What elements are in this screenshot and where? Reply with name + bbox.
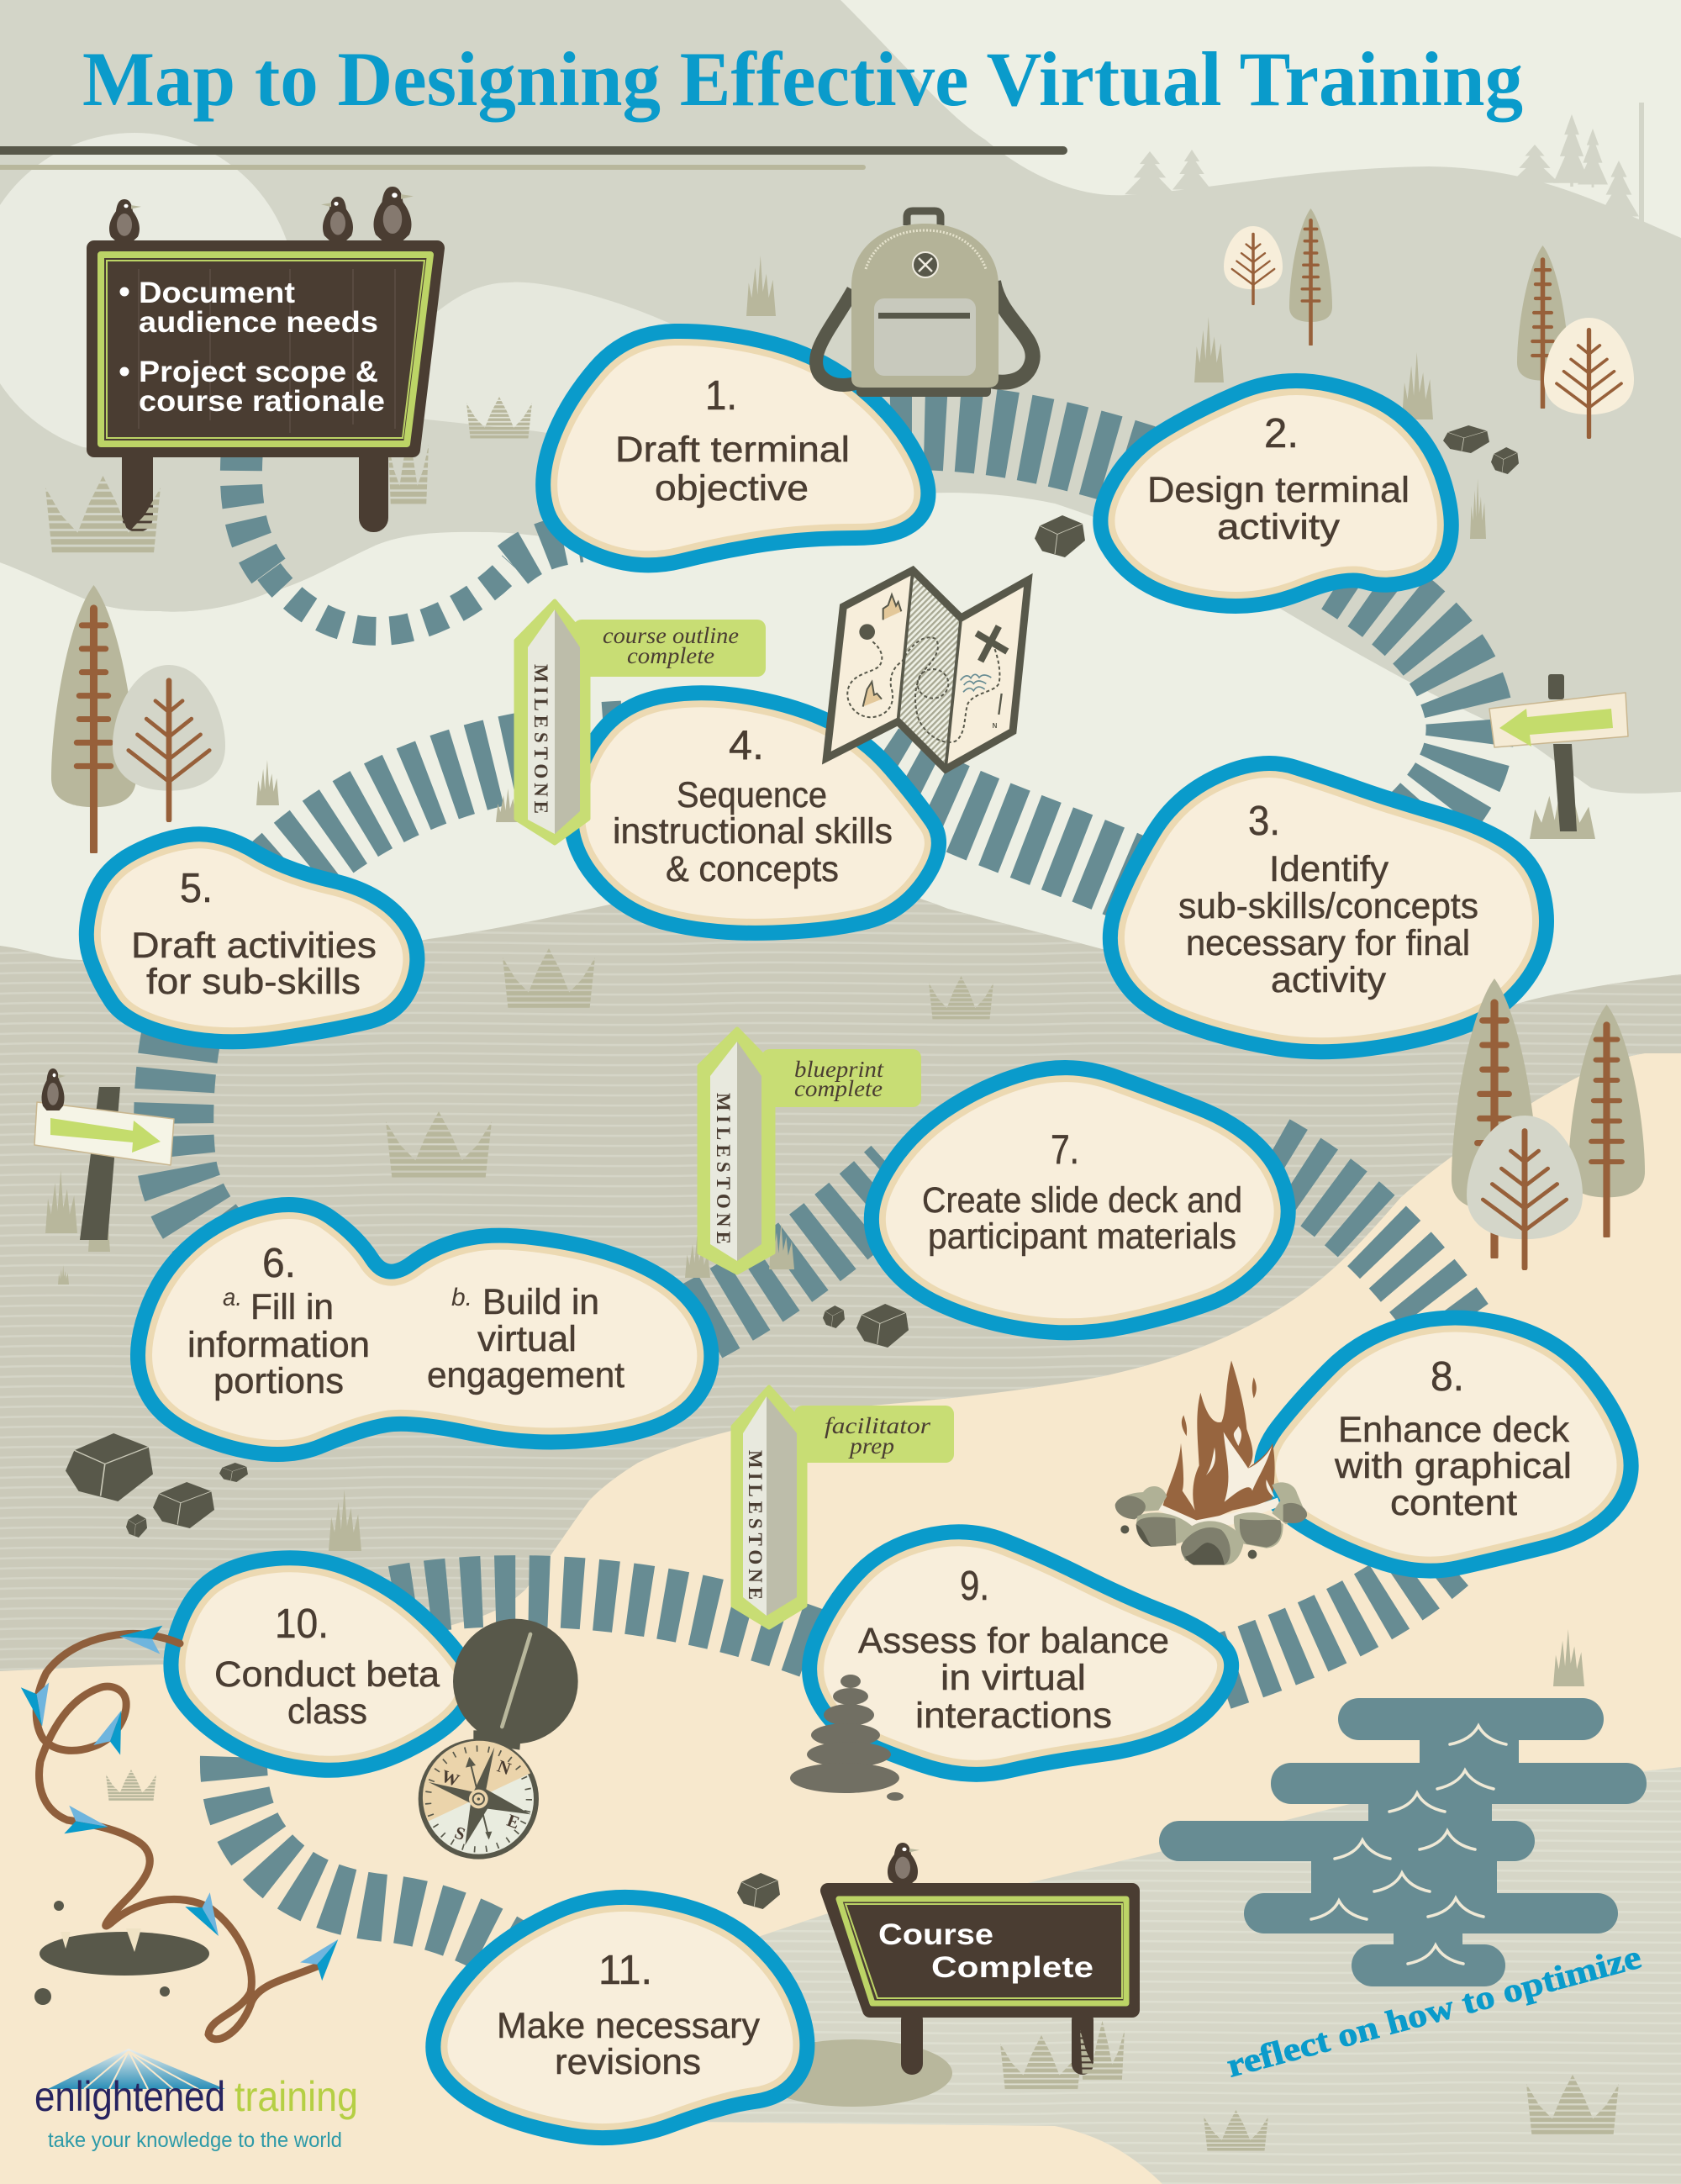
backpack (816, 211, 1033, 397)
compass: N (495, 1756, 514, 1779)
step 4: & concepts (666, 849, 839, 889)
step 7 (872, 1068, 1288, 1332)
step 5: for sub-skills (146, 962, 361, 1002)
step 9: 9. (960, 1564, 989, 1609)
step 8: 8. (1431, 1354, 1464, 1400)
arrow sign pointing right (34, 1087, 174, 1240)
milestone: facilitator prep (733, 1387, 954, 1627)
step 10: 10. (275, 1601, 329, 1647)
compass: S (452, 1822, 468, 1844)
winding route with arrows (21, 1622, 349, 2039)
step 8: content (1390, 1483, 1517, 1523)
step 10 (171, 1558, 472, 1770)
step 8: with graphical (1334, 1446, 1572, 1486)
step 3 (1110, 763, 1547, 1052)
step 9: Assess for balance (858, 1621, 1169, 1661)
campfire (1115, 1360, 1307, 1565)
step 10: class (287, 1691, 367, 1732)
step 1: Draft terminal (615, 430, 850, 470)
step 6: portions (213, 1361, 344, 1401)
compass: E (504, 1810, 522, 1833)
step 9: interactions (915, 1696, 1112, 1736)
step 4: Sequence (677, 775, 827, 815)
step 3: 3. (1248, 799, 1280, 844)
path ties: step 3 to step 4 (874, 765, 1160, 891)
rocks (66, 425, 1519, 1909)
step 1 (543, 331, 928, 565)
step 11 (433, 1897, 807, 2138)
step 1: objective (655, 468, 809, 509)
step 6: virtual (477, 1319, 577, 1359)
logo (34, 2049, 358, 2152)
tree top small round (1224, 226, 1283, 304)
title rules (0, 146, 1067, 170)
distant pine silhouettes (1125, 103, 1644, 224)
milestone: blueprint complete: complete (794, 1076, 883, 1101)
arrow sign pointing left (1489, 674, 1628, 831)
map (826, 570, 1028, 769)
step 2: 2. (1264, 411, 1299, 456)
step 8 (1262, 1318, 1631, 1571)
start sign: audience needs (139, 306, 378, 339)
path ties: step 4 to step 5 (277, 744, 647, 878)
start sign (94, 248, 437, 532)
step 3: Identify (1269, 849, 1389, 889)
logo: take your knowledge to the world (48, 2129, 342, 2152)
step 3: necessary for final (1186, 923, 1470, 963)
spiky grass tufts (45, 256, 1595, 1686)
milestone: course outline complete: course outline (603, 623, 739, 648)
path ties: step 2 to step 3 (1345, 572, 1470, 841)
step 5: Draft activities (131, 926, 377, 966)
path ties: step 9 to step 10 (395, 1591, 824, 1648)
step 6: information (187, 1325, 370, 1365)
compass (419, 1619, 578, 1860)
tree right tall (1517, 245, 1568, 408)
milestone: blueprint complete: blueprint (794, 1057, 885, 1082)
compass: W (439, 1765, 462, 1791)
step 4 (571, 693, 939, 933)
step 7: 7. (1051, 1127, 1079, 1173)
title: Map to Designing Effective Virtual Training (82, 36, 1523, 122)
step 5 (87, 834, 417, 1042)
path ties: step 8 to step 9 (1219, 1555, 1446, 1673)
step 9: in virtual (941, 1658, 1086, 1698)
step 2 (1100, 381, 1452, 606)
step 6: engagement (427, 1355, 624, 1395)
tree right round (1544, 318, 1634, 437)
fern in front of end sign post (1080, 2021, 1125, 2081)
end sign (828, 1891, 1132, 2075)
map: N (993, 722, 998, 730)
step 4: 4. (729, 723, 764, 768)
step 11: revisions (555, 2042, 701, 2082)
fern grass tufts (106, 397, 1619, 2152)
fern in front of left post (45, 476, 161, 555)
step 10: Conduct beta (214, 1654, 440, 1695)
step 5: 5. (180, 866, 213, 911)
bird on arrow sign (42, 1068, 66, 1110)
path ties: step 1 to step 2 (891, 427, 1177, 479)
tree left tall (51, 585, 136, 852)
step 11: 11. (598, 1948, 652, 1993)
step 8: Enhance deck (1338, 1410, 1570, 1450)
start sign: Document (139, 277, 295, 309)
step 6: 6. (262, 1241, 296, 1286)
step 3: sub-skills/concepts (1178, 886, 1478, 926)
milestone: course outline complete: complete (627, 643, 714, 668)
step 11: Make necessary (497, 2006, 760, 2046)
milestone: blueprint complete: MILESTONE (713, 1093, 734, 1244)
start sign: Project scope & (139, 356, 378, 388)
end sign: Complete (931, 1951, 1093, 1984)
milestone: course outline complete (516, 601, 766, 843)
path ties: step 10 to step 11 (234, 1757, 521, 1959)
step 3: activity (1271, 960, 1387, 1000)
tree cluster right round (1467, 1116, 1583, 1268)
path ties: step 6 to step 7 (672, 1177, 899, 1337)
path ties: step 7 to step 8 (1269, 1156, 1454, 1328)
logo: training (234, 2073, 358, 2120)
bird on sign (321, 197, 353, 240)
start sign: course rationale (139, 385, 385, 418)
step 1: 1. (705, 373, 737, 419)
ground shadow under end sign (754, 2039, 952, 2107)
hole in ground (34, 1901, 209, 2005)
step 6 (138, 1205, 711, 1454)
step 7: participant materials (928, 1216, 1236, 1257)
bird on end sign (888, 1843, 920, 1884)
step 6: b. (451, 1284, 472, 1311)
milestone: blueprint complete (699, 1029, 921, 1273)
end sign: Course (878, 1918, 993, 1951)
step 9 (809, 1532, 1231, 1775)
milestone: course outline complete: MILESTONE (530, 664, 551, 814)
lake (1159, 1698, 1647, 1986)
step 6: Build in (482, 1282, 599, 1322)
path ties: start to step 1 (241, 450, 580, 631)
reflect caption: reflect on how to optimize (1223, 1938, 1645, 2085)
tree top tall (1289, 208, 1332, 345)
milestone: facilitator prep: facilitator (825, 1413, 931, 1438)
milestone: facilitator prep: MILESTONE (745, 1450, 766, 1600)
path ties: step 5 to step 6 (174, 1038, 227, 1253)
tree cluster right tall 2 (1568, 1005, 1645, 1236)
milestone: facilitator prep: prep (848, 1433, 894, 1459)
bird on sign (109, 199, 141, 241)
step 6: Fill in (250, 1287, 334, 1327)
step 4: instructional skills (613, 811, 893, 852)
step 6: a. (223, 1284, 242, 1311)
step 7: Create slide deck and (922, 1180, 1242, 1221)
bird on sign (373, 187, 414, 240)
tree cluster right tall 1 (1452, 979, 1537, 1257)
rock cairn (790, 1675, 904, 1801)
step 2: Design terminal (1147, 470, 1410, 510)
logo: enlightened (34, 2073, 225, 2120)
step 2: activity (1217, 507, 1341, 547)
tree left round (113, 665, 225, 820)
